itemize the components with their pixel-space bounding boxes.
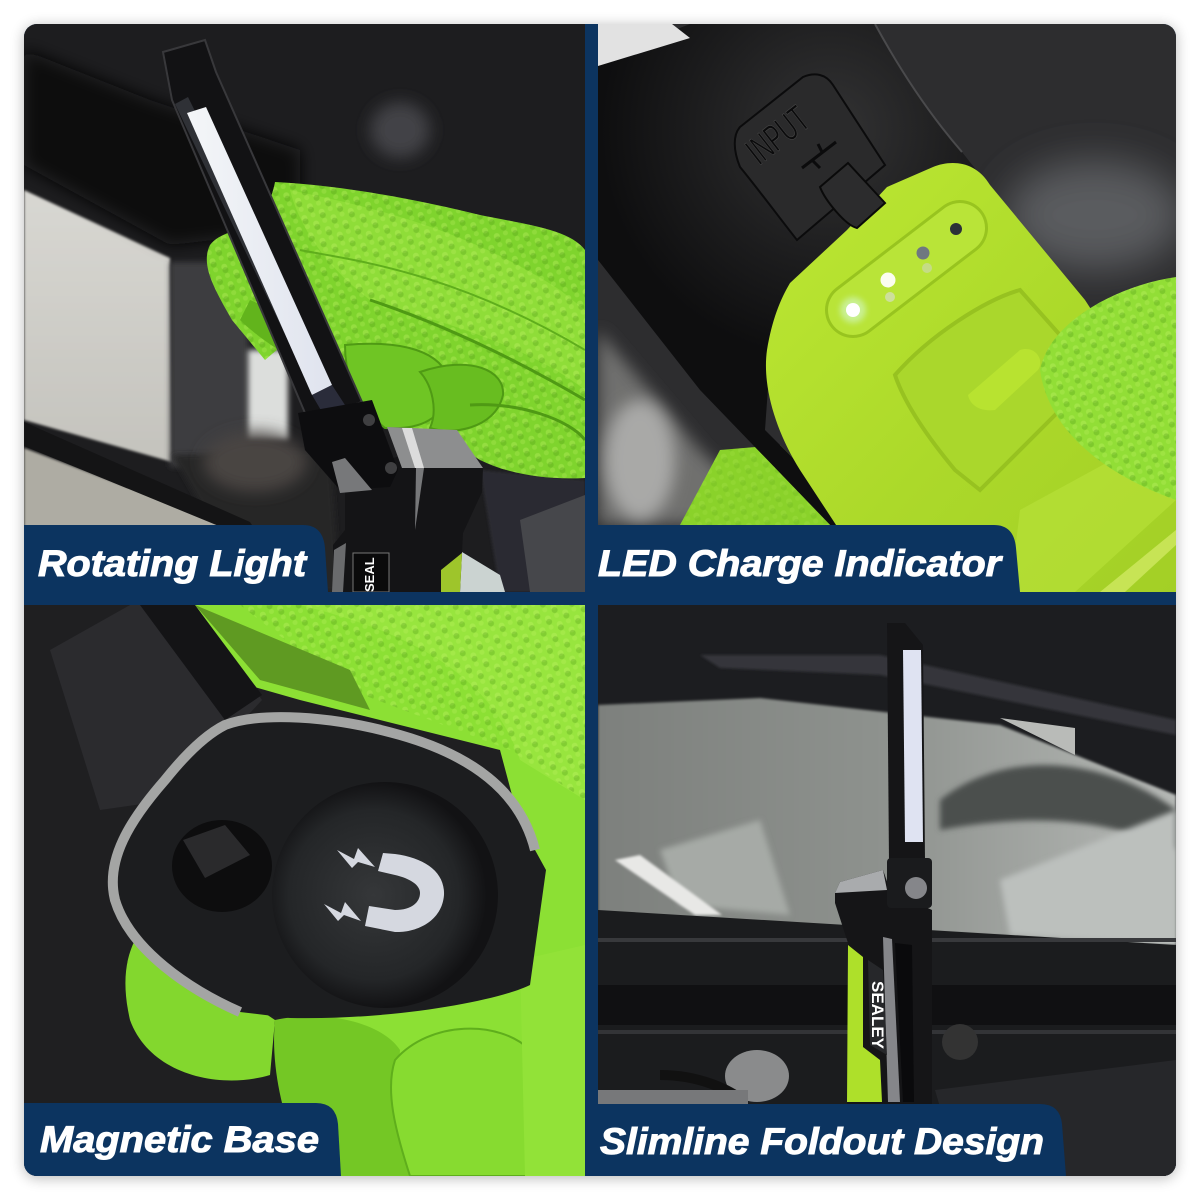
engine bay <box>598 910 1176 1176</box>
fingers <box>240 300 276 348</box>
label: LED charge indicator <box>598 525 1020 592</box>
windscreen <box>598 698 1176 945</box>
black head <box>598 24 1000 530</box>
label: magnetic base <box>24 1103 341 1176</box>
green body <box>766 163 1176 592</box>
heading: rotating light: Rotating Light <box>38 543 308 584</box>
panel: slimline foldout design photo <box>598 605 1176 1176</box>
icon: magnet <box>324 848 444 932</box>
wiper and bonnet edge <box>700 655 1176 735</box>
hinge and base: SEAL <box>362 557 377 592</box>
panel: magnetic base photo <box>24 605 585 1176</box>
icon: USB symbol <box>802 142 836 168</box>
magnetic base <box>113 717 546 1018</box>
label: rotating light <box>24 525 328 592</box>
panel: LED charge indicator photo <box>598 24 1185 592</box>
panel: rotating light photo <box>24 24 585 592</box>
handle <box>50 605 370 810</box>
light bar <box>163 40 362 420</box>
INPUT lettering: INPUT <box>738 98 817 173</box>
label: slimline foldout design <box>598 1104 1066 1176</box>
glove thumb <box>1040 277 1176 500</box>
lamp <box>835 623 932 1110</box>
heading: slimline foldout design: Slimline Foldout Design <box>600 1121 1044 1162</box>
heading: LED charge indicator: LED Charge Indicator <box>598 543 1004 584</box>
gloved hand <box>125 605 585 1176</box>
blurred background <box>598 160 1185 525</box>
LED indicators <box>840 223 962 323</box>
workshop and car background <box>24 50 585 592</box>
charge port tab <box>820 163 885 228</box>
hinge and base <box>298 400 483 592</box>
heading: magnetic base: Magnetic Base <box>40 1119 319 1160</box>
lamp: SEALEY <box>868 981 887 1050</box>
glove <box>207 182 585 478</box>
